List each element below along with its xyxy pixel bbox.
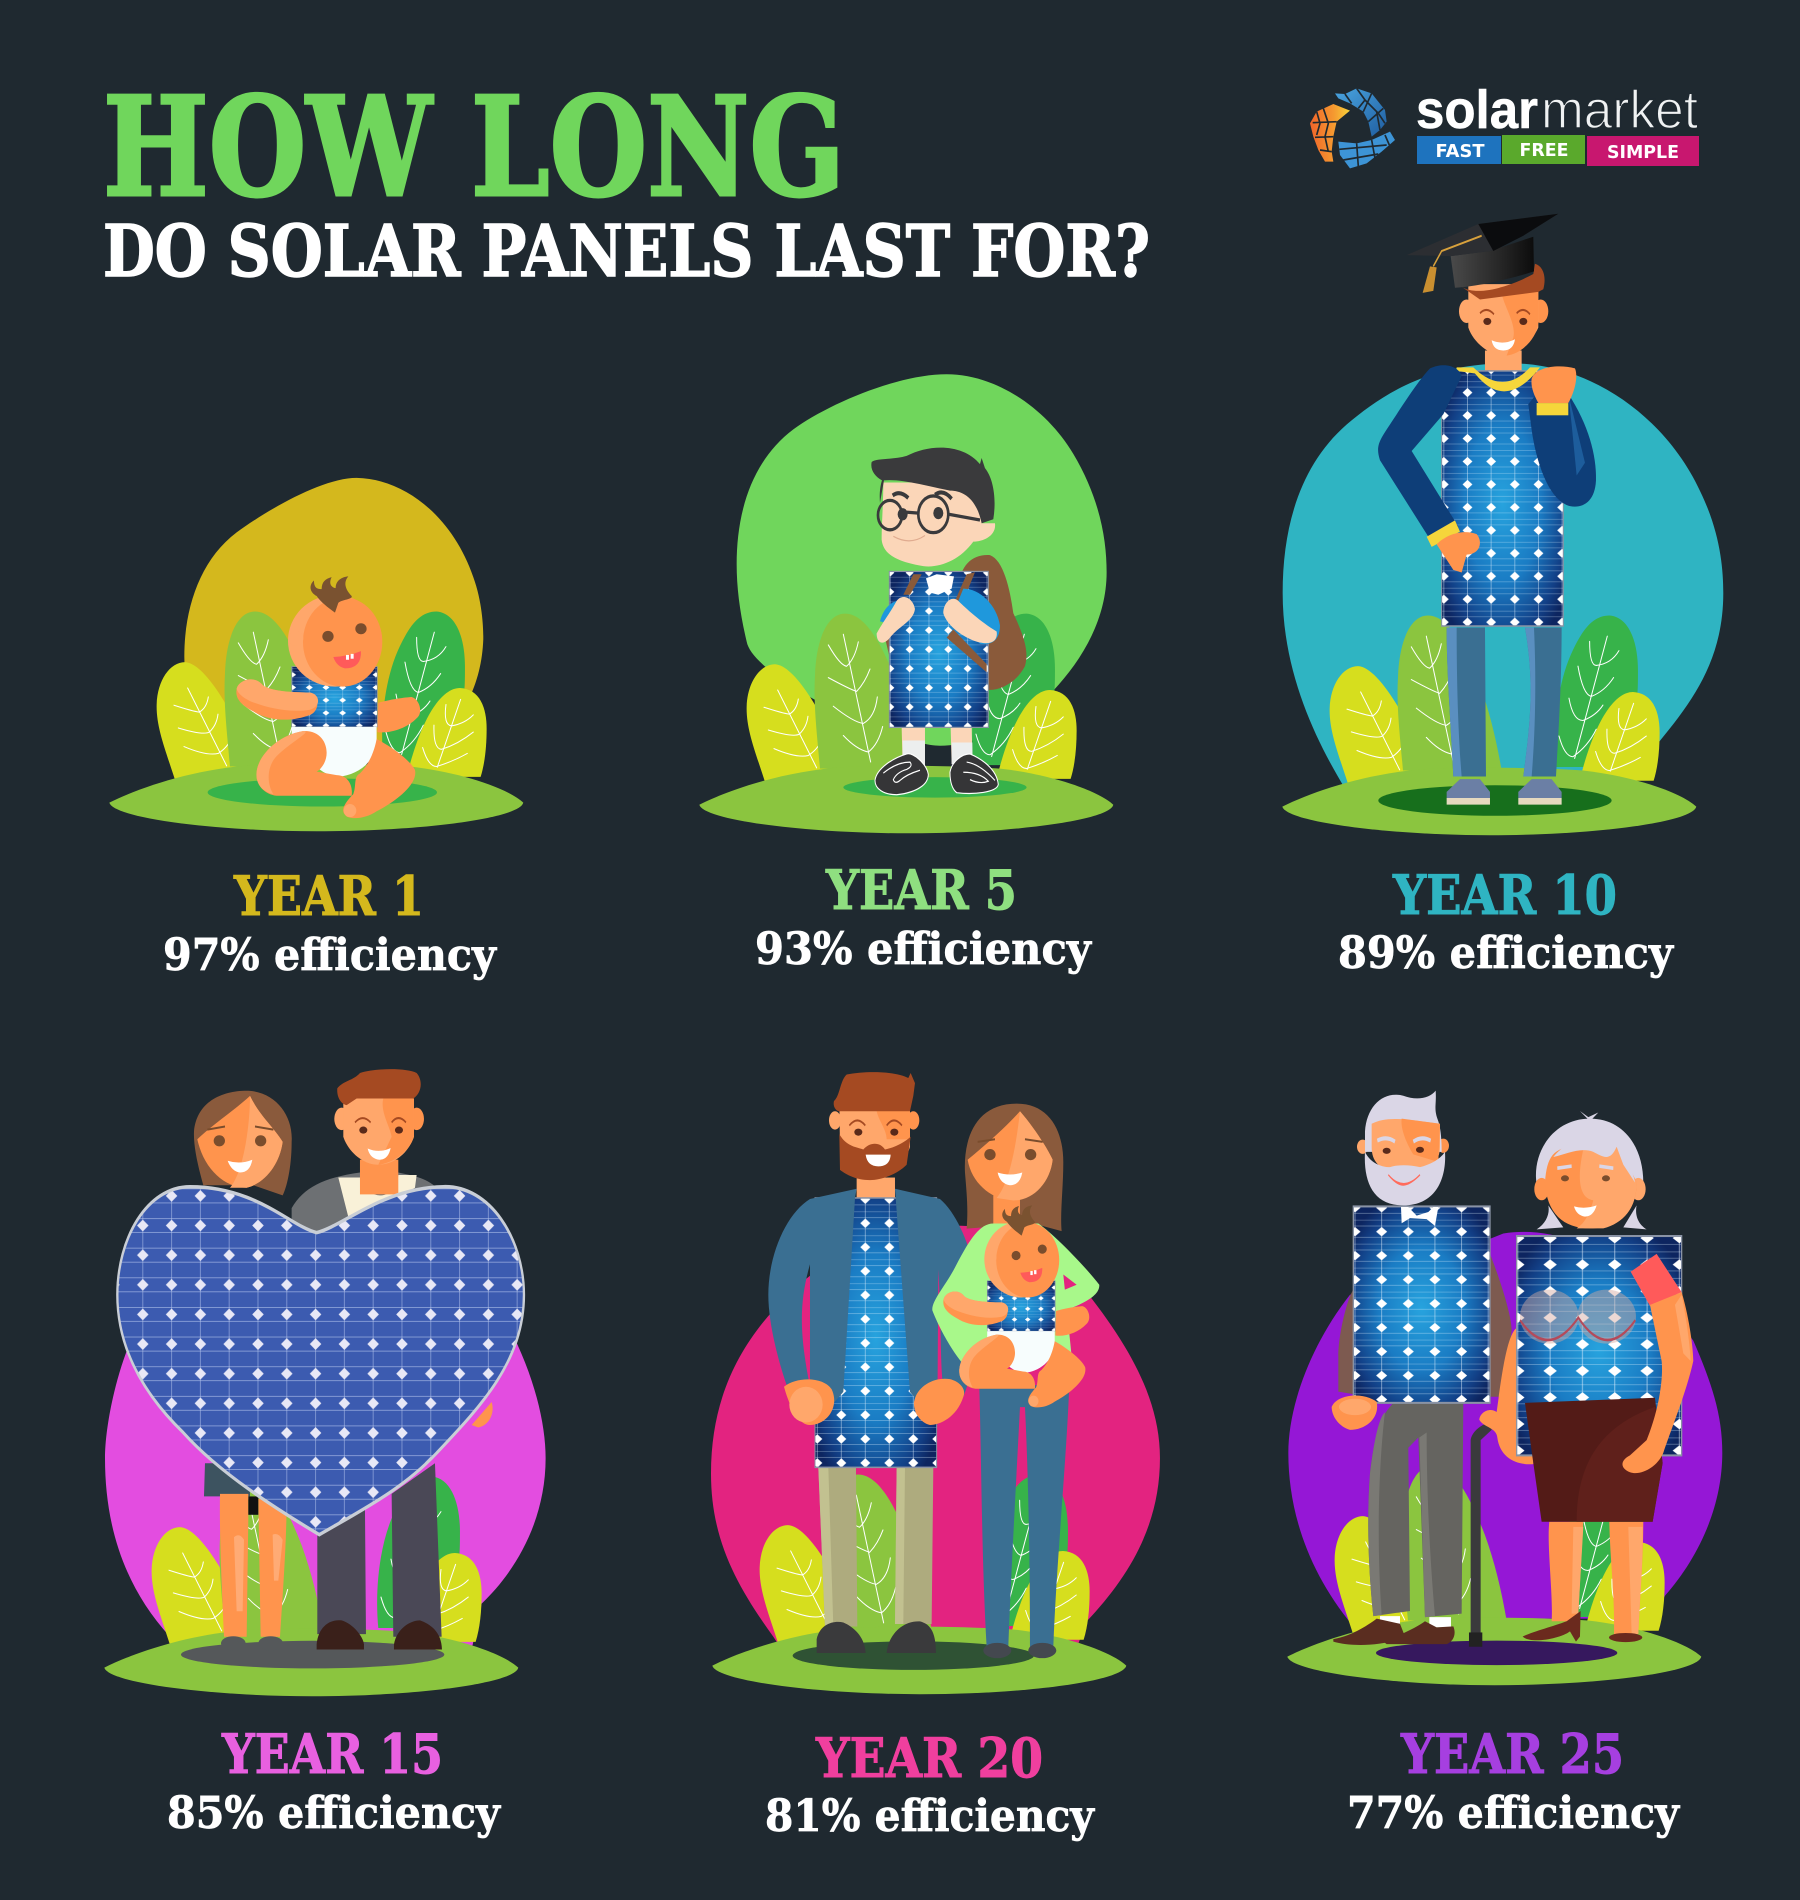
label: year 10: YEAR 10 bbox=[1392, 863, 1617, 927]
blob bbox=[711, 1226, 1160, 1657]
illustration: baby bbox=[109, 478, 523, 831]
head and beard bbox=[829, 1072, 919, 1180]
shoes bbox=[1447, 779, 1562, 805]
legs bbox=[1549, 1522, 1643, 1634]
baby bbox=[943, 1205, 1089, 1407]
graduation cap bbox=[1407, 214, 1558, 293]
illustration: graduate bbox=[1282, 214, 1723, 835]
neck bbox=[1485, 351, 1522, 381]
panel: year 15 bbox=[104, 1069, 546, 1839]
left cuff and hand bbox=[1427, 520, 1480, 572]
stat: 77%: 77% efficiency bbox=[1347, 1788, 1680, 1839]
panel: year 5 bbox=[699, 374, 1113, 975]
hair bbox=[1462, 264, 1545, 299]
head bbox=[1534, 1136, 1646, 1228]
logo: solarmarket bbox=[1310, 80, 1699, 168]
blob bbox=[184, 478, 483, 756]
heart solar panel bbox=[117, 1187, 524, 1535]
shoes bbox=[875, 754, 998, 795]
stat: 81%: 81% efficiency bbox=[765, 1791, 1095, 1842]
panel: year 20 bbox=[711, 1072, 1160, 1842]
collar bbox=[1457, 367, 1540, 391]
shoes bbox=[817, 1621, 936, 1653]
sleeves bbox=[880, 589, 1000, 644]
jeans bbox=[979, 1384, 1069, 1647]
solar panel bbox=[815, 1198, 937, 1467]
figure: old man bbox=[1332, 1091, 1512, 1645]
hands bbox=[784, 1379, 964, 1425]
tag: fast: FAST bbox=[1436, 141, 1485, 162]
plants and ground bbox=[109, 612, 523, 831]
stat: 85%: 85% efficiency bbox=[167, 1788, 501, 1839]
title bbox=[103, 67, 1150, 293]
legs bbox=[902, 727, 973, 766]
ground shadow bbox=[793, 1641, 1034, 1670]
skirt bbox=[1525, 1398, 1663, 1522]
right cuff and hand bbox=[1531, 366, 1576, 415]
sleeve bbox=[1631, 1254, 1682, 1306]
stat: 97%: 97% efficiency bbox=[163, 930, 497, 981]
stat: 89%: 89% efficiency bbox=[1338, 928, 1674, 979]
label: year 20: YEAR 20 bbox=[815, 1726, 1043, 1790]
ground shadow bbox=[843, 777, 1027, 798]
ground shadow bbox=[181, 1641, 444, 1668]
blob bbox=[1283, 363, 1723, 812]
panel: year 1 bbox=[109, 478, 523, 981]
head and beard bbox=[1357, 1091, 1449, 1205]
head bbox=[882, 482, 995, 566]
face bbox=[968, 1111, 1053, 1201]
collar bbox=[1401, 1207, 1438, 1226]
icon: solar ring bbox=[1310, 88, 1395, 168]
blob bbox=[105, 1295, 546, 1657]
hair bbox=[965, 1104, 1063, 1231]
sweater bbox=[1338, 1254, 1512, 1397]
illustration: elderly couple bbox=[1287, 1091, 1722, 1685]
hair bbox=[871, 448, 995, 523]
figure: graduate bbox=[1378, 214, 1596, 805]
ground shadow bbox=[208, 778, 437, 806]
figure: woman bbox=[194, 1091, 292, 1651]
hair bbox=[1536, 1111, 1647, 1229]
label: year 25: YEAR 25 bbox=[1400, 1722, 1624, 1786]
left arm bbox=[1378, 365, 1462, 539]
trousers bbox=[818, 1467, 933, 1627]
tag: simple bbox=[1587, 136, 1699, 166]
label: year 5: YEAR 5 bbox=[825, 858, 1017, 922]
neck bbox=[857, 1178, 895, 1201]
panel: year 25 bbox=[1287, 1091, 1722, 1839]
heading: do solar panels last for: DO SOLAR PANELS LAST FOR? bbox=[103, 209, 1150, 293]
cane bbox=[1469, 1422, 1492, 1647]
heading: how long: HOW LONG bbox=[103, 67, 845, 228]
plants and ground bbox=[104, 1477, 518, 1696]
arms bbox=[877, 597, 997, 643]
solar panel bbox=[889, 571, 988, 727]
figure: woman holding baby bbox=[932, 1104, 1099, 1658]
blob bbox=[737, 374, 1107, 746]
plants and ground bbox=[712, 1474, 1126, 1694]
jacket bbox=[768, 1189, 980, 1425]
tag: fast bbox=[1417, 136, 1501, 164]
illustration: family bbox=[711, 1072, 1160, 1694]
collar and straps bbox=[903, 572, 987, 672]
label: year 1: YEAR 1 bbox=[233, 864, 424, 928]
ground shadow bbox=[1378, 785, 1612, 816]
figure: man with beard bbox=[768, 1072, 980, 1653]
logo: solarmarket: market bbox=[1541, 80, 1698, 140]
figure: boy bbox=[871, 448, 1026, 795]
stat: 93%: 93% efficiency bbox=[755, 924, 1092, 975]
wordmark: solar bbox=[1416, 80, 1538, 140]
shoes bbox=[1523, 1611, 1642, 1642]
neck bbox=[993, 1195, 1020, 1226]
illustration: couple with heart panel bbox=[104, 1069, 546, 1696]
plants and ground bbox=[699, 614, 1113, 833]
plants and ground bbox=[1282, 616, 1696, 835]
solar panel bbox=[1442, 371, 1563, 626]
right arm bbox=[1622, 1292, 1693, 1473]
left arm bbox=[1479, 1328, 1533, 1464]
bra overlay bbox=[1520, 1290, 1636, 1344]
hand bbox=[959, 1359, 990, 1384]
jeans bbox=[1447, 628, 1562, 777]
backpack bbox=[885, 555, 1026, 690]
figure: old woman bbox=[1479, 1111, 1693, 1642]
panel: year 10 bbox=[1282, 214, 1723, 979]
illustration: schoolboy bbox=[699, 374, 1113, 833]
tag: free: FREE bbox=[1520, 140, 1568, 161]
socks bbox=[1380, 1616, 1451, 1627]
solar panel bbox=[1517, 1236, 1682, 1455]
hand bbox=[1332, 1396, 1377, 1430]
label: year 15: YEAR 15 bbox=[221, 1722, 443, 1786]
figure: baby bbox=[236, 576, 420, 818]
tag: free bbox=[1502, 135, 1585, 164]
blob bbox=[1288, 1232, 1722, 1626]
solar panel bbox=[1353, 1206, 1490, 1403]
figure: man bbox=[292, 1069, 493, 1649]
right arm bbox=[1528, 394, 1596, 507]
tag: simple: SIMPLE bbox=[1607, 142, 1679, 163]
trousers bbox=[1368, 1403, 1463, 1617]
shoes bbox=[983, 1643, 1056, 1658]
glasses and eyes bbox=[878, 492, 980, 541]
head bbox=[1459, 284, 1548, 356]
shoes bbox=[1333, 1619, 1455, 1645]
plants and ground bbox=[1287, 1466, 1701, 1685]
cardigan bbox=[932, 1223, 1099, 1377]
ground shadow bbox=[1376, 1641, 1617, 1665]
